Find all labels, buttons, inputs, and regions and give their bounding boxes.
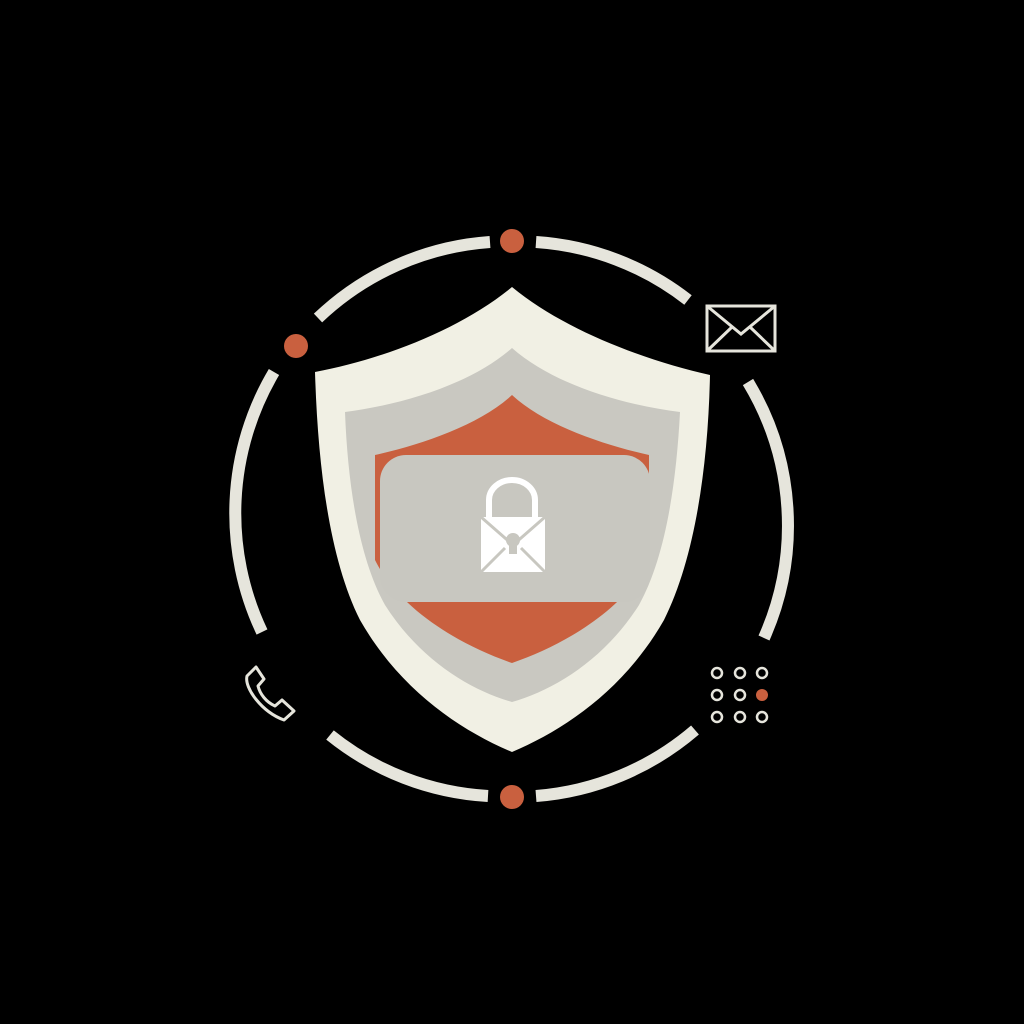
icon: lock envelope <box>481 480 545 572</box>
shield middle layer <box>345 348 680 702</box>
icon: envelope <box>707 306 775 351</box>
ring: segmented circle <box>235 242 788 796</box>
ring nodes: orange dots <box>284 229 524 809</box>
shield orange core <box>375 395 649 663</box>
shield <box>315 287 710 752</box>
icon: phone <box>247 667 294 720</box>
shield outer layer <box>315 287 710 752</box>
icon: keypad dots grid <box>712 668 768 722</box>
inner panel <box>380 455 650 602</box>
